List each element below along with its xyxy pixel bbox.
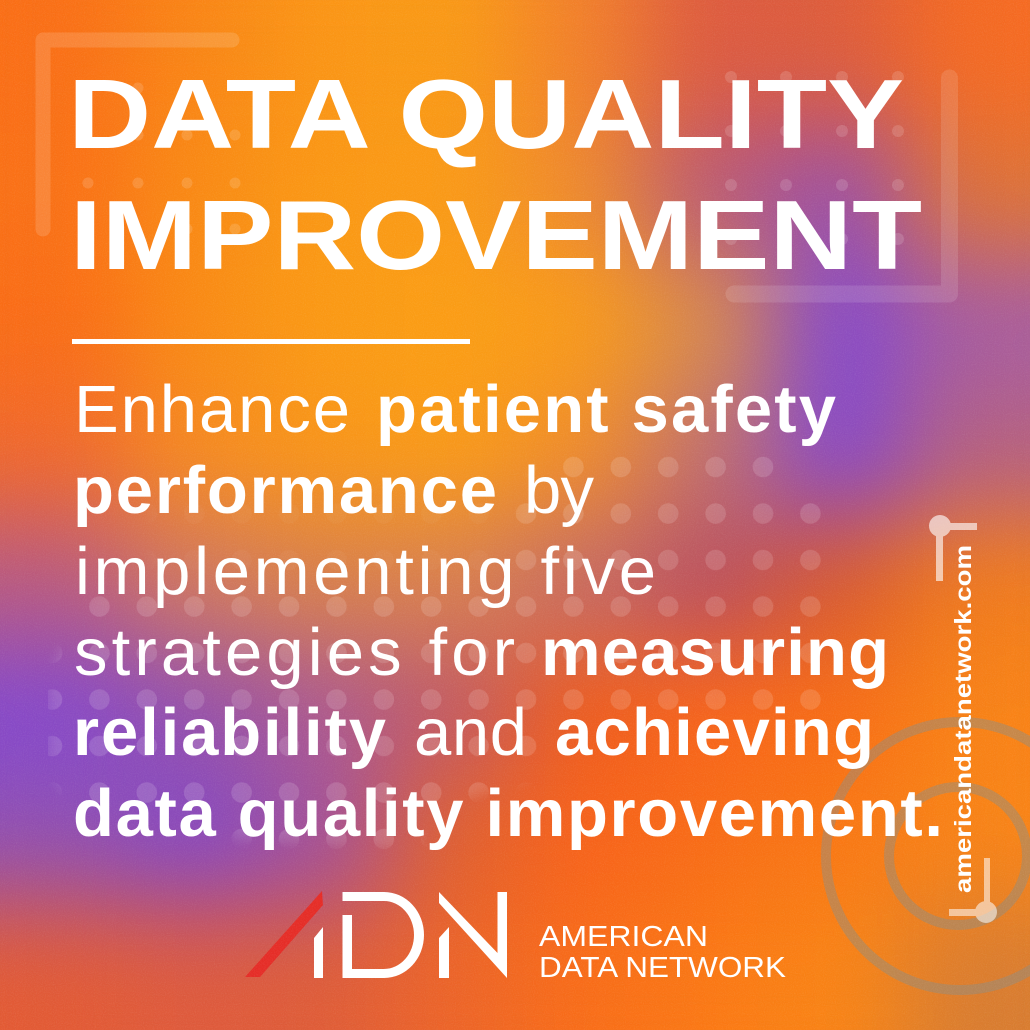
- body text: measuring: [541, 615, 889, 690]
- bracket: right: [734, 78, 950, 294]
- body text: data quality improvement.: [73, 776, 943, 851]
- dot grid: lower centre: [48, 443, 835, 863]
- title: DATA QUALITY: [68, 59, 904, 169]
- bracket: top left: [43, 40, 232, 229]
- website url: americandatanetwork.com: [950, 545, 976, 893]
- body text: strategies for: [74, 615, 515, 690]
- connector: top: [929, 515, 977, 581]
- dot grid: top right: [725, 71, 904, 245]
- body text: Enhance: [74, 372, 350, 447]
- logo: [245, 891, 787, 984]
- body text: performance: [73, 453, 497, 528]
- logo wordmark: AMERICAN: [539, 921, 708, 953]
- logo wordmark: DATA NETWORK: [539, 952, 787, 984]
- logo mark: red slash: [245, 891, 323, 977]
- divider line: [72, 339, 470, 344]
- body text: reliability: [73, 695, 386, 770]
- concentric rings: [826, 722, 1030, 990]
- logo mark: ADN letters: [314, 892, 507, 978]
- dot grid: top left: [82, 82, 240, 234]
- connector: bottom: [949, 858, 997, 923]
- title: IMPROVEMENT: [70, 180, 922, 290]
- body text: and: [414, 695, 527, 770]
- body text: implementing five: [75, 534, 656, 609]
- body text: patient safety: [376, 372, 836, 447]
- body text: by: [524, 453, 594, 528]
- body text: [73, 372, 943, 851]
- body text: achieving: [555, 695, 874, 770]
- title: [68, 59, 922, 290]
- logo wordmark: [539, 921, 787, 984]
